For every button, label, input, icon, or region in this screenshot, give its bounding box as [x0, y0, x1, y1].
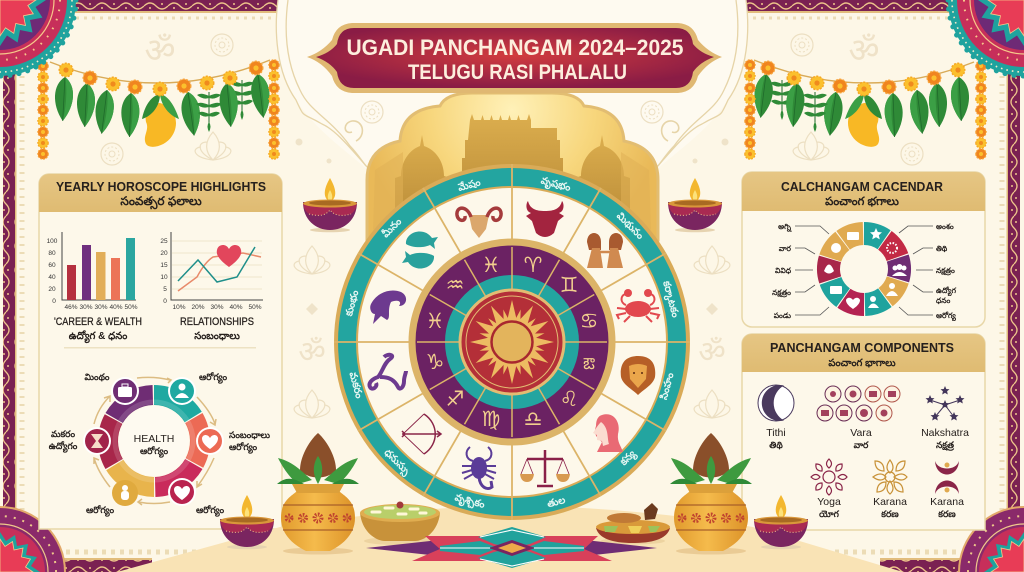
icon: pisces fish	[402, 231, 438, 269]
icon: scorpio	[462, 447, 496, 489]
rasi names: మిథునం	[614, 211, 645, 242]
faint decorative motifs: ॐ	[848, 31, 880, 71]
health ring centre label: HEALTH	[134, 433, 174, 445]
faint decorative motifs: ॐ	[144, 31, 176, 71]
ring labels: మింథం	[84, 372, 110, 382]
panel: panchangam components	[742, 334, 985, 530]
line chart: relationships: 40%	[229, 304, 243, 311]
panel header	[742, 172, 985, 211]
icon: gemini twins	[587, 233, 623, 268]
heading: PANCHANGAM COMPONENTS	[770, 340, 954, 355]
line chart: relationships: 50%	[248, 304, 262, 311]
inner sign glyphs: ♍︎	[482, 407, 500, 431]
floor	[117, 505, 903, 572]
icon: cancer crab	[617, 289, 659, 322]
left shrine	[395, 135, 450, 215]
node: gold person	[112, 480, 138, 506]
ring labels	[49, 372, 270, 517]
panel header	[742, 334, 985, 372]
rasi names: సింహం	[659, 372, 676, 401]
rasi names: మీనం	[379, 215, 404, 240]
subtitle text: TELUGU RASI PHALALU	[408, 61, 627, 84]
right shrine	[575, 135, 630, 215]
inner sign glyphs: ♑︎	[426, 350, 444, 374]
heading telugu: సంవత్సర ఫలాలు	[120, 194, 202, 210]
bar chart: career and wealth: 30%	[94, 304, 108, 311]
rasi names: మేషం	[457, 176, 482, 194]
heading telugu: పంచాంగ భాగాలు	[828, 358, 896, 369]
ring labels: ఉద్యోగం	[49, 441, 78, 453]
inner sign glyphs: ♒︎	[446, 273, 464, 297]
inner sign glyphs: ♌︎	[560, 387, 578, 411]
corner rosette bottom right	[958, 506, 1024, 572]
rasi names: కన్య	[618, 448, 640, 470]
temple backdrop	[367, 93, 658, 240]
component: tithi: Tithi	[766, 427, 786, 439]
ring labels: ఆరోగ్యం	[199, 372, 227, 384]
line chart: relationships: 10%	[172, 304, 186, 311]
rasi names: తుల	[546, 495, 567, 510]
side border strips	[3, 70, 1020, 515]
heading: YEARLY HOROSCOPE HIGHLIGHTS	[56, 179, 266, 194]
faint decorative motifs: ॐ	[298, 335, 326, 370]
icon: sagittarius bow	[402, 414, 441, 454]
faint decorative motifs: ॐ	[698, 335, 726, 370]
ring labels: అగ్ని	[778, 222, 792, 232]
line chart: relationships: 5	[163, 286, 167, 293]
ring labels	[772, 222, 957, 322]
line chart: relationships: 20	[160, 250, 168, 257]
inner sign glyphs: ♓︎	[482, 253, 500, 277]
heading: CALCHANGAM CACENDAR	[781, 179, 944, 194]
corner rosette top left	[0, 0, 76, 76]
icon: aries ram	[457, 208, 501, 238]
sun	[470, 300, 554, 384]
heading telugu: పంచాంగ భగాలు	[825, 196, 899, 208]
component: nakshatra	[921, 386, 969, 451]
inner sign glyphs: ఔ	[583, 354, 595, 373]
cycle arrows	[94, 377, 216, 505]
inner sign glyphs: ♓︎	[426, 309, 444, 333]
corner rosette top right	[948, 0, 1024, 76]
line chart: relationships: 30%	[210, 304, 224, 311]
bar chart: career and wealth: 30%	[79, 304, 93, 311]
component: yoga: Yoga	[817, 496, 841, 508]
bar chart: career and wealth: 0	[52, 298, 56, 305]
label: relationships: RELATIONSHIPS	[180, 316, 254, 328]
component: karana moons: కరణ	[937, 509, 956, 519]
component: karana moons	[930, 461, 964, 519]
inner sign glyphs: ♊︎	[560, 273, 578, 297]
ring labels: నక్షత్రం	[936, 266, 955, 276]
rasi names	[344, 175, 681, 513]
inner sign glyphs: ♎︎	[524, 407, 542, 431]
node: pink heart	[168, 478, 196, 506]
icon: taurus bull	[526, 201, 564, 237]
component: yoga: యోగ	[819, 509, 840, 519]
component: karana flower: కరణ	[880, 509, 899, 519]
line chart: relationships: 15	[160, 262, 168, 269]
calendar ring	[814, 219, 914, 319]
node: purple work	[111, 377, 139, 405]
faint decorative motifs	[101, 31, 923, 418]
icon: libra scales	[520, 450, 570, 486]
kalash right	[670, 433, 752, 554]
component: tithi	[758, 385, 794, 450]
plate of sweets	[596, 503, 670, 544]
panel header	[39, 174, 282, 212]
inner sign glyphs: ♋︎	[580, 309, 598, 333]
ring labels: ఉద్యోగ	[936, 286, 957, 297]
ring icons	[824, 228, 907, 309]
ring labels: వివిధ	[775, 266, 792, 275]
inner sign glyphs: ♐︎	[446, 387, 464, 411]
ring labels: నక్షత్రం	[772, 288, 791, 298]
ring labels: సంబంధాలు	[229, 430, 270, 440]
top centre arch	[276, 0, 748, 170]
ring labels: ధనం	[936, 296, 951, 305]
rasi names: వృషభం	[539, 175, 572, 196]
top border strips	[70, 0, 955, 18]
bar chart: career and wealth: 60	[48, 262, 56, 269]
label: career and wealth: ఉద్యోగ & ధనం	[69, 330, 127, 344]
component: vara: వార	[854, 440, 869, 450]
bar chart: career and wealth: 46%	[64, 304, 78, 311]
icon: aquarius dolphin	[370, 290, 406, 324]
line chart: relationships: 25	[160, 238, 168, 245]
panel: calendar	[742, 172, 985, 327]
ring labels: ఆరోగ్య	[936, 311, 956, 322]
bar chart: career and wealth: 40	[48, 274, 56, 281]
rasi names: మకరం	[347, 371, 364, 400]
node: salmon heart	[196, 427, 224, 455]
component: karana moons: Karana	[930, 496, 964, 508]
bottom border strips	[62, 552, 970, 572]
garland left	[38, 60, 279, 159]
inner sign glyphs	[426, 253, 598, 431]
lamp upper left	[303, 178, 357, 232]
ring labels: ఆరోగ్యం	[196, 505, 224, 517]
label: career and wealth: 'CAREER & WEALTH	[54, 316, 142, 328]
line chart: relationships: 10	[160, 274, 168, 281]
component: vara	[817, 386, 900, 450]
bar chart: career and wealth: 80	[48, 250, 56, 257]
node: crimson hourglass	[83, 427, 111, 455]
label: relationships: సంబంధాలు	[194, 331, 240, 342]
rasi names: ధనుస్సు	[381, 447, 413, 479]
inner sign glyphs: ♈︎	[524, 253, 542, 277]
health ring centre label: ఆరోగ్యం	[140, 446, 168, 458]
health ring	[49, 372, 270, 517]
line chart: relationships	[160, 232, 263, 311]
component: yoga	[811, 459, 847, 519]
line chart: relationships: 20%	[191, 304, 205, 311]
lamp lower right	[754, 495, 808, 549]
title banner	[307, 23, 722, 93]
lamps	[220, 178, 808, 549]
component: karana flower	[873, 460, 907, 519]
gopuram	[462, 114, 563, 200]
line chart: relationships: 0	[163, 298, 167, 305]
component: nakshatra: Nakshatra	[921, 427, 969, 439]
ring labels: తిథి	[936, 244, 948, 253]
bar chart: career and wealth: 100	[47, 238, 58, 245]
rangoli	[366, 527, 657, 568]
rasi names: కర్కాటకం	[659, 279, 681, 319]
icon: capricorn	[369, 355, 406, 389]
icon: virgo maiden	[593, 414, 623, 452]
ring labels: పండు	[774, 311, 791, 320]
health ring centre label	[134, 433, 174, 458]
lamp upper right	[668, 178, 722, 232]
bowl of pachadi	[360, 502, 440, 545]
ring labels: వార	[779, 244, 792, 253]
kalash left	[277, 433, 359, 554]
component: tithi: తిథి	[769, 440, 783, 450]
ring labels: మకరం	[51, 429, 75, 439]
leader lines	[795, 226, 933, 315]
icon: leo lion	[621, 356, 655, 395]
bar chart: career and wealth: 40%	[109, 304, 123, 311]
garland right	[745, 60, 986, 159]
ring labels: అంశం	[936, 222, 954, 231]
rasi names: వృశ్చికం	[453, 492, 486, 513]
bar chart: career and wealth: 50%	[124, 304, 138, 311]
corner rosette bottom left	[0, 506, 66, 572]
zodiac wheel	[334, 164, 690, 520]
component: vara: Vara	[850, 427, 872, 439]
label: relationships	[180, 316, 254, 342]
bar chart: career and wealth: 20	[48, 286, 56, 293]
label: career and wealth	[54, 316, 142, 344]
component: karana flower: Karana	[873, 496, 907, 508]
ring labels: ఆరోగ్యం	[86, 505, 114, 517]
bar chart: career and wealth	[47, 232, 138, 311]
component: nakshatra: నక్షత్ర	[936, 440, 955, 451]
lamp lower left	[220, 495, 274, 549]
node: teal doctor	[168, 377, 196, 405]
title text: UGADI PANCHANGAM 2024–2025	[346, 35, 684, 60]
rasi names: కుంభం	[344, 289, 361, 318]
ring labels: ఆరోగ్యం	[229, 442, 258, 454]
